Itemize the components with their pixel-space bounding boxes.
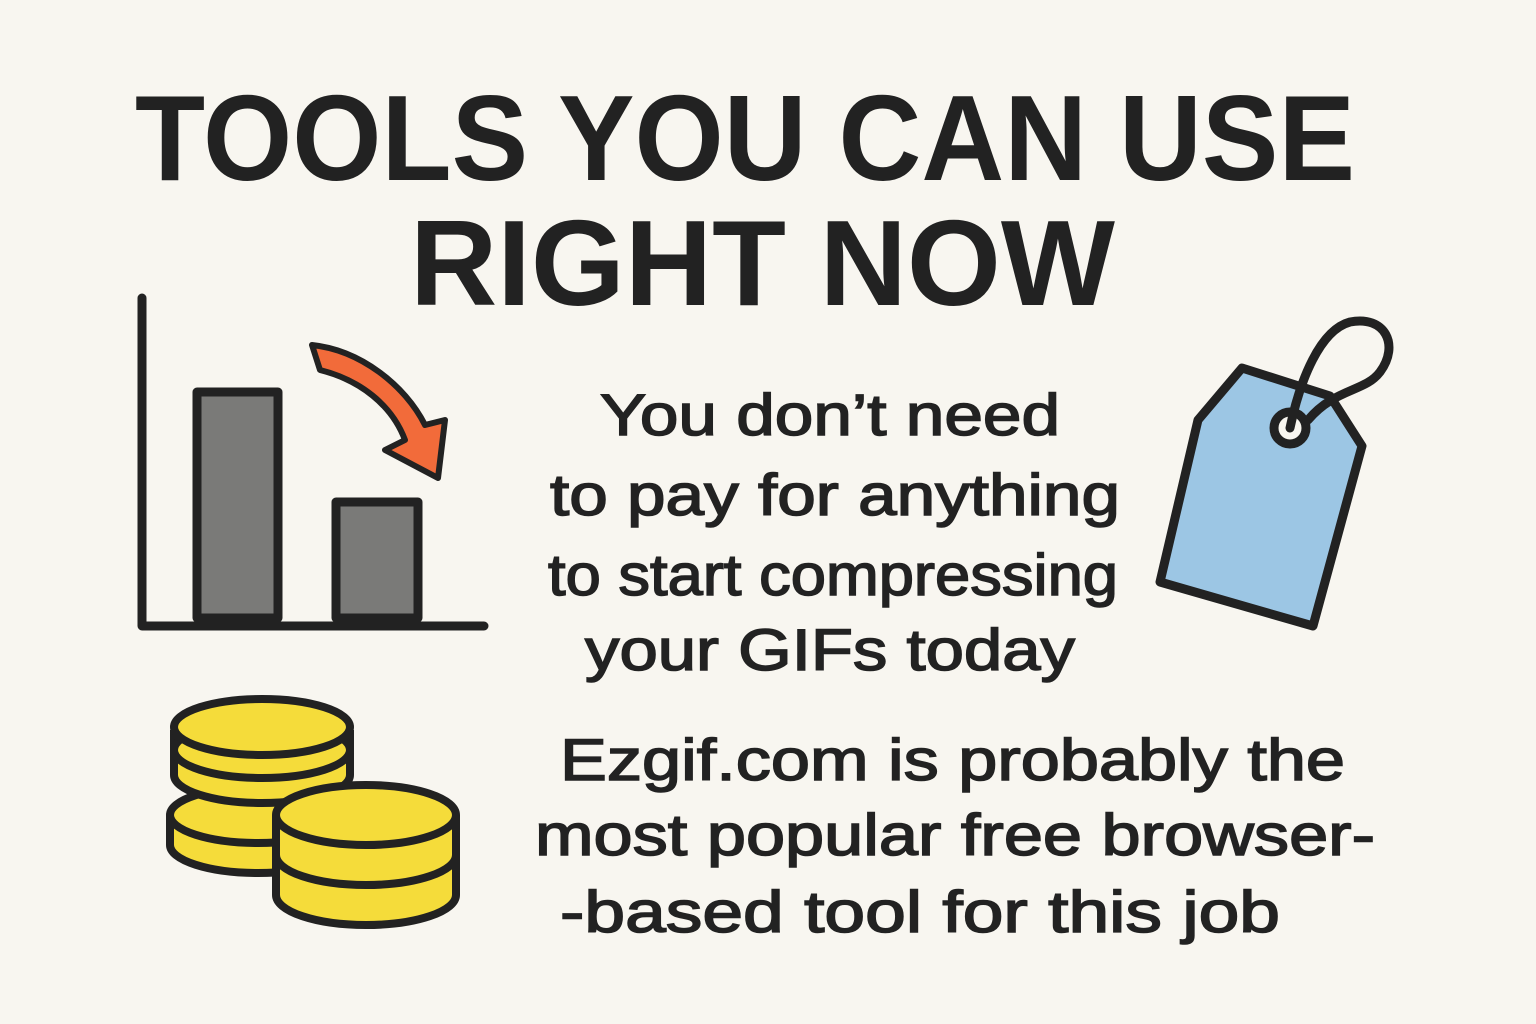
text block: ezgif: -based tool for this job: [560, 880, 1280, 945]
text block: free tools: to start compressing: [548, 543, 1118, 608]
icon: coin stacks: [170, 699, 456, 925]
text block: free tools: your GIFs today: [585, 618, 1075, 683]
text block: ezgif: most popular free browser-: [535, 803, 1375, 868]
text block: ezgif: [535, 728, 1375, 945]
title: [135, 70, 1355, 331]
text block: ezgif: Ezgif.com is probably the: [560, 728, 1345, 793]
text block: free tools: [548, 383, 1120, 683]
bar chart: [142, 298, 484, 626]
icon: orange down arrow: [312, 345, 445, 478]
title: RIGHT NOW: [410, 195, 1116, 331]
icon: price tag: [1160, 321, 1389, 626]
text block: free tools: to pay for anything: [550, 463, 1120, 528]
text block: free tools: You don’t need: [600, 383, 1060, 448]
title: TOOLS YOU CAN USE: [135, 70, 1355, 206]
